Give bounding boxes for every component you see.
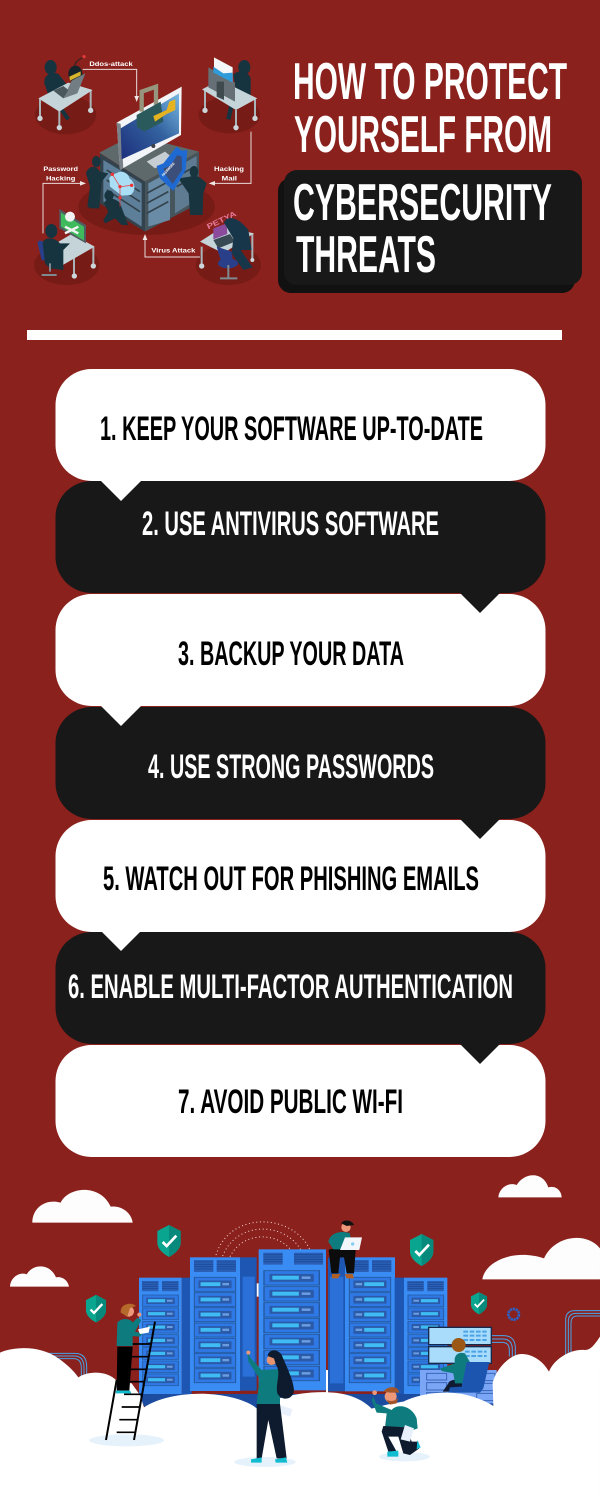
background clouds (10, 1175, 600, 1287)
rack C (259, 1249, 326, 1390)
illustration: team protecting a data centre (0, 1175, 600, 1502)
tip 3 (56, 594, 546, 726)
hacker bottom left with skull (38, 209, 96, 279)
hacker bottom right with Petya: PETYA (205, 209, 238, 231)
monitor with padlock (117, 87, 182, 170)
attack labels: Mail (222, 176, 237, 183)
kneeling man (372, 1387, 421, 1457)
tip 3: 3. BACKUP YOUR DATA (178, 635, 404, 673)
title highlight box (278, 170, 582, 293)
arrows between attacks and server (43, 69, 251, 257)
rack B (190, 1257, 257, 1391)
attack labels (43, 61, 244, 254)
tip 2 (56, 481, 546, 613)
rack E (395, 1278, 447, 1394)
shield badge (157, 147, 187, 191)
attack labels: Ddos-attack (89, 61, 133, 68)
hackers around server (86, 156, 207, 225)
attack labels: Hacking (214, 166, 244, 173)
operator at monitors (420, 1327, 497, 1403)
rack D (328, 1257, 395, 1391)
foreground cloud (0, 1337, 600, 1502)
gear icon (508, 1309, 519, 1320)
attack labels: Hacking (46, 176, 75, 183)
person sitting on rack with laptop (328, 1221, 362, 1278)
cables (47, 1311, 600, 1377)
security shields (86, 1225, 487, 1322)
tip 7: 7. AVOID PUBLIC WI-FI (178, 1083, 403, 1121)
title (293, 52, 567, 163)
tip 5 (56, 820, 546, 951)
rack A (139, 1278, 192, 1394)
shield badge: PASSWORD (161, 162, 176, 177)
cloud data node (109, 172, 134, 207)
server tower (99, 135, 199, 232)
tip 7 (56, 1045, 546, 1157)
hacker top right with mail (202, 57, 258, 130)
title highlight box: THREATS (296, 225, 436, 283)
arrowheads (80, 96, 215, 240)
signal arcs (216, 1222, 310, 1257)
woman pointing up (246, 1348, 294, 1463)
attack labels: Virus Attack (151, 247, 196, 254)
floor shadows under people (89, 1434, 430, 1467)
hacker bottom right with Petya (199, 209, 254, 278)
person on ladder (106, 1304, 155, 1440)
tip 4 (56, 707, 546, 839)
floor shadows (34, 96, 261, 285)
attack labels: Password (43, 166, 78, 173)
hacker top left with bomb (37, 55, 93, 130)
illustration: cyber attacks on a server (34, 55, 261, 285)
tip 1 (56, 369, 546, 501)
server racks (137, 1249, 493, 1415)
tip 6 (56, 932, 546, 1064)
